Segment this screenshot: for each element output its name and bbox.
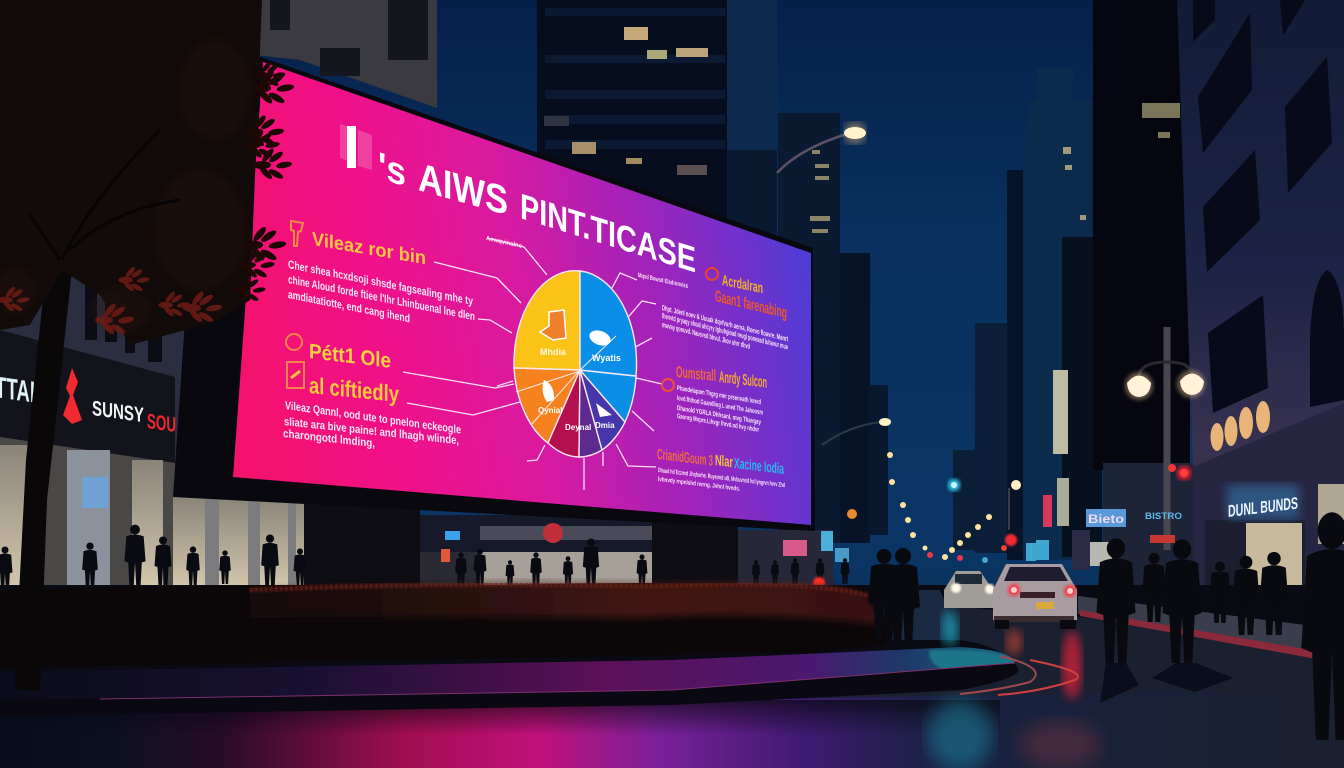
- sidewalk: [0, 596, 1344, 716]
- foreground pedestrians: [868, 512, 1344, 740]
- right block 1: mwvay qonuvd. Nausvsd bhvul. Jkov uhrr dhvd: [662, 320, 750, 351]
- red leaves: [0, 266, 222, 336]
- left building with storefront: [0, 0, 437, 590]
- pie icons: Qynial: [538, 406, 562, 415]
- pie icons: Mhdia: [540, 347, 567, 357]
- left block 2: al ciftiedly: [309, 372, 399, 407]
- billboard screen: Anrdy Sulcon: [719, 368, 767, 392]
- street lamps: [777, 123, 1205, 550]
- shop signs on right: BISTRO: [1145, 511, 1182, 521]
- left block 2: charongotd lmding,: [283, 428, 375, 450]
- connector arrows: [403, 238, 662, 490]
- right block 2: Dhanold YGRLA Dhhsanl, mvg Thavgay: [677, 405, 761, 426]
- right block 3: Nlar: [715, 452, 733, 471]
- distant street lights: [813, 452, 1049, 589]
- left block 2: Vileaz Qannl, ood ute to pnelon eckeogle: [285, 400, 461, 437]
- billboard support posts: [304, 490, 738, 595]
- title: [340, 124, 696, 280]
- road: [0, 600, 1344, 768]
- left block 1: Cher shea hcxdsoji shsde fagsealing mhe ty: [288, 258, 473, 308]
- shop signs on right: [1072, 485, 1299, 570]
- city buildings: [537, 0, 1344, 605]
- storefront sign: SUNSY: [92, 397, 144, 427]
- storefront sign: [0, 368, 176, 437]
- billboard screen: [233, 62, 811, 525]
- right block 3: Dhuad hd Ezznvd Jhqhurhe. Ruyeond uB, Mvbuvnsd hd lyngrvn hvrv Zhd: [658, 467, 785, 489]
- ground: [0, 585, 1344, 768]
- title: PINT.TICASE: [520, 186, 696, 280]
- left block 2: Pétt1 Ole: [309, 340, 391, 373]
- right block 2: Phandelapam Thgrg mer prsenvath lonvd: [677, 385, 761, 406]
- right block 3: [657, 446, 785, 493]
- pie icons: Deynal: [565, 423, 591, 432]
- hedge: [0, 582, 886, 668]
- pie icons: Wyatis: [592, 353, 621, 363]
- pie chart: [514, 271, 637, 457]
- background crowd and shops: [0, 515, 849, 590]
- title: AIWS: [418, 154, 508, 224]
- billboard frame: [173, 55, 815, 531]
- left block 2: [283, 334, 461, 450]
- left block 1: chine Aloud forde ftiee l'Ihr Lhinbuenal lne dlen: [288, 273, 475, 323]
- left block 1: [288, 221, 475, 325]
- right block 3: lvhnvdy rnpnlshd nvrng. Jvhnl hvnds.: [658, 476, 740, 493]
- left block 1: amdiatatiotte, end cang ihend: [288, 288, 410, 325]
- right block 3: CrianidGoum 3: [657, 446, 713, 470]
- right block 1: lhenvtd pryaqy shoal uhcyry lghuhgioad reugl poneasd luhavur mue: [662, 311, 788, 351]
- right block 1: Dhpt. Jdenl noev & Uuuak dqvfvurh aerva, Roevo floavre. Manrt: [662, 303, 788, 344]
- shop signs on right: Bieto: [1088, 512, 1124, 526]
- leaves over billboard: [234, 61, 295, 303]
- right block 2: lovd.fhthod Guandling L uned The Jahoosm: [677, 395, 763, 417]
- right block 2: [662, 363, 767, 434]
- pie icons: [538, 310, 621, 432]
- title: 's: [378, 145, 406, 195]
- right block 1: Gaan1 farenabing: [715, 287, 787, 322]
- right block 2: Oumstrall: [676, 363, 716, 385]
- right block 1: [662, 268, 788, 351]
- tree: [0, 0, 295, 690]
- right block 2: Gaonrg Mnpre.Lihvgr lhrvd.nd hvy nhdvr: [677, 413, 759, 434]
- pie icons: Dmia: [595, 421, 615, 430]
- cars: [944, 564, 1077, 629]
- storefront sign: SOU: [147, 410, 176, 437]
- label right of pie: Mqxd Bowsd Elsdronviss: [638, 272, 688, 290]
- left block 2: sliate ara bive paine! and lhagh wlinde,: [284, 416, 459, 447]
- right block 1: Acrdalran: [722, 272, 763, 297]
- shop signs on right: DUNL BUNDS: [1228, 494, 1298, 521]
- right block 3: Xacine Iodia: [734, 455, 784, 478]
- label above pie: Aewqvinalne: [486, 235, 522, 250]
- left block 1: Vileaz ror bin: [312, 229, 426, 269]
